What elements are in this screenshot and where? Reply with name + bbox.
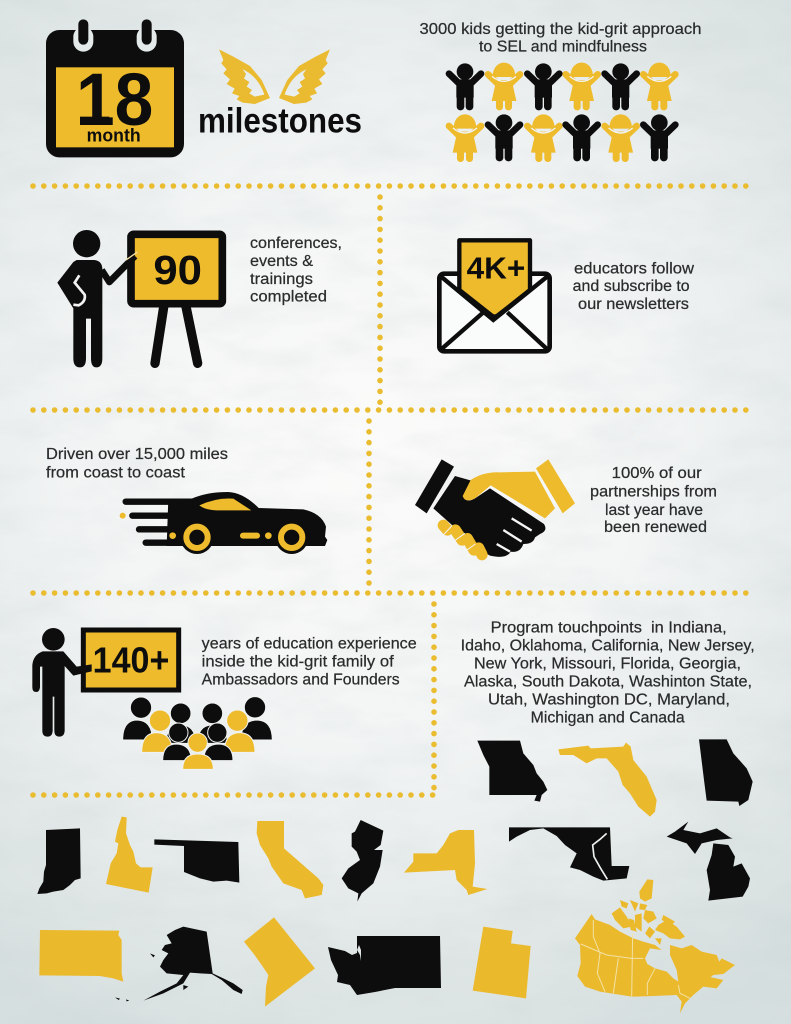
icon: presenter with board 90: 90 — [153, 247, 202, 293]
icon: envelope 4K+ — [439, 240, 550, 351]
text: 3000 kids: to SEL and mindfulness — [479, 39, 647, 56]
text: years of experience: inside the kid-grit family of — [202, 654, 394, 671]
text: partnerships — [590, 465, 717, 536]
map: Washington — [328, 936, 441, 995]
map: Alaska — [115, 927, 243, 1001]
map: California — [257, 821, 323, 898]
icon: calendar 18 month: month — [87, 125, 141, 146]
map: Maryland — [509, 827, 629, 881]
text: conferences: conferences, — [250, 235, 342, 252]
logo: wings — [219, 49, 330, 104]
text: program touchpoints: Program touchpoints in Indiana, — [491, 620, 727, 637]
map: Canada — [575, 879, 735, 1013]
map: Florida — [558, 743, 657, 817]
icon: calendar 18 month: 18 — [76, 58, 153, 141]
maps: upper-right state silhouettes — [404, 739, 753, 998]
text: 3000 kids — [420, 21, 702, 56]
text: educators: and subscribe to — [573, 278, 690, 295]
text: educators: educators follow — [574, 260, 695, 277]
text: years of experience — [202, 635, 417, 688]
text: conferences: events & — [250, 253, 314, 270]
icon: handshake — [415, 459, 575, 557]
text: program touchpoints: Michigan and Canada — [531, 710, 685, 727]
icon: presenter with board 140+ — [32, 628, 179, 737]
map: Georgia — [699, 739, 753, 806]
map: Washington DC — [244, 917, 315, 1007]
text: program touchpoints: Alaska, South Dakota, Washinton State, — [464, 674, 752, 691]
text: driven miles: from coast to coast — [46, 465, 186, 482]
icon: presenter with board 90 — [57, 230, 222, 367]
heading: milestones: milestones — [198, 102, 362, 140]
text: educators — [573, 260, 695, 313]
text: years of experience: Ambassadors and Founders — [202, 671, 400, 688]
map: New York — [404, 830, 487, 895]
text: driven miles: Driven over 15,000 miles — [46, 446, 228, 463]
text: program touchpoints — [461, 620, 755, 727]
text: program touchpoints: New York, Missouri, Florida, Georgia, — [474, 655, 741, 672]
maps: bottom-left state silhouettes — [37, 817, 383, 1007]
icon: row of children — [449, 63, 675, 162]
map: Utah — [473, 927, 531, 998]
map: South Dakota — [39, 930, 123, 982]
text: program touchpoints: Utah, Washington DC, Maryland, — [488, 692, 730, 709]
text: partnerships: been renewed — [604, 519, 707, 536]
map: Idaho — [106, 817, 153, 893]
text: conferences: completed — [250, 289, 327, 306]
icon: calendar 18 month — [46, 19, 184, 157]
text: conferences: trainings — [250, 271, 313, 288]
text: driven miles — [46, 446, 228, 482]
map: Missouri — [477, 741, 547, 802]
text: partnerships: partnerships from — [590, 484, 717, 501]
text: educators: our newsletters — [578, 296, 689, 313]
map: Oklahoma — [154, 839, 239, 883]
text: partnerships: 100% of our — [612, 465, 702, 482]
map: Michigan — [667, 822, 750, 901]
dotted dividers — [33, 186, 752, 795]
map: Indiana — [37, 828, 81, 894]
text: conferences — [250, 235, 342, 306]
icon: presenter with board 140+: 140+ — [93, 639, 169, 680]
icon: audience group — [123, 697, 272, 769]
icon: envelope 4K+: 4K+ — [467, 251, 525, 285]
icon: speeding car — [120, 492, 327, 554]
text: program touchpoints: Idaho, Oklahoma, California, New Jersey, — [461, 638, 755, 655]
text: 3000 kids: 3000 kids getting the kid-grit approach — [420, 21, 702, 38]
map: New Jersey — [342, 820, 383, 902]
text: years of experience: years of education experience — [202, 635, 417, 652]
text: partnerships: last year have — [605, 502, 703, 519]
